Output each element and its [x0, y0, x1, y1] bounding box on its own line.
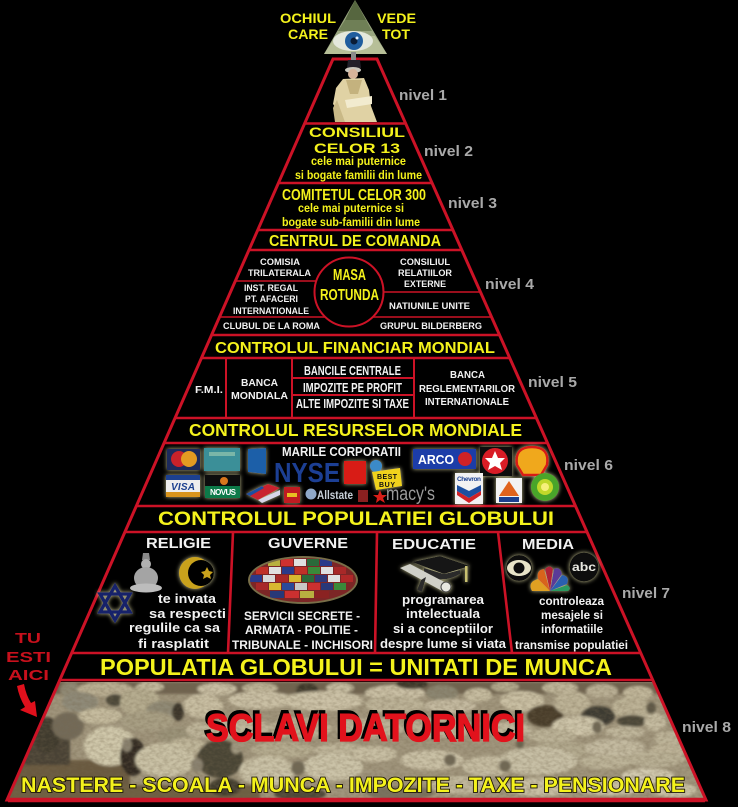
panel: level 4: CONSILIUL	[400, 257, 451, 267]
panel: level 5	[195, 364, 515, 411]
panel: media: informatiile	[541, 624, 603, 636]
callout: you are here	[6, 630, 51, 717]
heading: controlul financiar mondial: CONTROLUL FINANCIAR MONDIAL	[215, 340, 495, 357]
panel: religie: sa respecti	[149, 607, 226, 621]
top row	[59, 682, 78, 694]
panel: religie: fi rasplatit	[138, 637, 210, 651]
icon: star of David	[100, 586, 130, 620]
panel: level 4: EXTERNE	[404, 279, 446, 289]
panel: level 3: bogate sub-familii din lume	[282, 217, 420, 229]
round table	[314, 258, 384, 326]
panel: level 4: NATIUNILE UNITE	[389, 301, 470, 311]
panel: religie: regulile ca sa	[129, 621, 221, 635]
panel: level 5: BANCA	[450, 369, 485, 381]
callout: you are here: TU	[15, 630, 41, 647]
logos: cards and banks: BUY	[379, 482, 395, 489]
panel: educatie: programarea	[402, 593, 485, 607]
panel: level 5: REGLEMENTARILOR	[419, 383, 515, 395]
level 5 label: nivel 5	[528, 374, 577, 391]
eye caption left	[280, 10, 336, 42]
icon: flag globe	[248, 556, 358, 604]
panel: religie: RELIGIE	[146, 536, 211, 552]
icon: graduation cap and diploma	[400, 556, 470, 592]
logo: Allstate	[306, 488, 368, 502]
bottom row	[209, 778, 241, 796]
eye caption right: TOT	[382, 26, 410, 42]
panel: media: MEDIA	[522, 537, 575, 553]
arrow: pointing to base	[17, 684, 37, 717]
panel: level 4: INST. REGAL	[244, 283, 298, 293]
panel: level 3	[282, 187, 426, 229]
logos: cards and banks: VISA	[171, 482, 195, 493]
panel: level 4: CLUBUL DE LA ROMA	[223, 321, 320, 331]
panel: media: controleaza	[539, 596, 605, 608]
logo: NYSE: NYSE	[274, 457, 340, 488]
level 3 label: nivel 3	[448, 195, 497, 212]
heading: populatia globului: POPULATIA GLOBULUI = UNITATI DE MUNCA	[100, 654, 612, 680]
panel: educatie	[380, 537, 507, 651]
panel: sheep base	[10, 682, 704, 798]
callout: you are here: AICI	[8, 667, 49, 684]
heading: centrul de comanda: CENTRUL DE COMANDA	[269, 233, 441, 250]
panel: educatie: EDUCATIE	[392, 537, 476, 553]
panel: level 2: CONSILIUL	[309, 125, 405, 140]
eye caption right	[377, 10, 416, 42]
logos: cards and banks	[166, 448, 402, 503]
title: sclavi datornici: SCLAVI DATORNICI	[206, 707, 525, 750]
panel: guverne: GUVERNE	[268, 536, 348, 552]
eye caption left: CARE	[288, 26, 328, 42]
heading: marile corporatii: MARILE CORPORATII	[282, 444, 401, 459]
panel: media	[506, 537, 628, 652]
panel: level 5: ALTE IMPOZITE SI TAXE	[296, 396, 409, 411]
panel: level 3: COMITETUL CELOR 300	[282, 187, 426, 204]
logo: Allstate: Allstate	[317, 488, 353, 502]
logos: oil companies: Chevron	[457, 476, 481, 483]
panel: level 5: IMPOZITE PE PROFIT	[303, 381, 402, 395]
logo: macys: macy's	[386, 484, 435, 505]
round table: ROTUNDA	[320, 287, 379, 304]
icon: crescent and star	[179, 557, 214, 589]
panel: level 4: INTERNATIONALE	[233, 306, 309, 316]
panel: media: transmise populatiei	[515, 640, 628, 652]
panel: guverne: TRIBUNALE - INCHISORI	[232, 638, 373, 652]
fifth row	[135, 743, 195, 777]
level 2 label: nivel 2	[424, 143, 473, 160]
panel: level 4: TRILATERALA	[248, 268, 312, 278]
panel: level 3: cele mai puternice si	[298, 203, 404, 215]
title: sclavi datornici: SCLAVI DATORNICI	[204, 704, 523, 747]
third row	[36, 716, 58, 752]
panel: level 2: cele mai puternice	[311, 156, 406, 168]
eye caption left: OCHIUL	[280, 10, 336, 26]
panel: level 4: PT. AFACERI	[245, 294, 298, 304]
level 4 label: nivel 4	[485, 276, 535, 293]
panel: level 2: CELOR 13	[314, 141, 401, 156]
heads	[122, 738, 132, 752]
icon: NBC peacock	[530, 566, 570, 591]
icon: buddha	[130, 553, 162, 592]
heading: controlul resurselor mondiale: CONTROLUL RESURSELOR MONDIALE	[189, 420, 522, 440]
panel: level 2	[295, 125, 422, 182]
panel: guverne: SERVICII SECRETE -	[244, 609, 360, 623]
eye caption right: VEDE	[377, 10, 416, 26]
panel: educatie: si a conceptiilor	[393, 622, 493, 636]
logos: oil companies	[413, 447, 559, 504]
panel: level 4: COMISIA	[260, 257, 301, 267]
icon: crowned figure	[333, 52, 377, 122]
level 1 label: nivel 1	[399, 87, 447, 104]
panel: guverne	[232, 536, 373, 652]
round table: MASA	[333, 267, 366, 284]
panel: level 6 corporations	[166, 444, 559, 505]
heading: controlul populatiei globului: CONTROLUL POPULATIEI GLOBULUI	[158, 508, 554, 530]
panel: level 5: BANCA	[241, 377, 278, 389]
fourth row	[84, 726, 136, 766]
panel: guverne: ARMATA - POLITIE -	[245, 623, 358, 637]
panel: level 4: GRUPUL BILDERBERG	[380, 321, 482, 331]
panel: level 5: MONDIALA	[231, 390, 288, 402]
level 7 label: nivel 7	[622, 585, 670, 602]
logos: cards and banks: BEST	[377, 474, 398, 481]
logos: oil companies: ARCO	[418, 452, 454, 467]
callout: you are here: ESTI	[6, 649, 51, 666]
panel: level 4: RELATIILOR	[398, 268, 453, 278]
panel: religie: te invata	[158, 592, 217, 606]
logos: cards and banks: NOVUS	[210, 488, 237, 497]
icon: abc: abc	[572, 560, 596, 574]
icon: all-seeing eye pyramid	[324, 0, 387, 54]
panel: religie	[100, 536, 226, 651]
level 6 label: nivel 6	[564, 457, 613, 474]
icon: CBS eye	[506, 555, 532, 581]
logo: macys	[373, 484, 435, 505]
panel: level 2: si bogate familii din lume	[295, 170, 422, 182]
panel: educatie: despre lume si viata	[380, 637, 507, 651]
panel: educatie: intelectuala	[406, 607, 481, 621]
panel: media: mesajele si	[541, 610, 603, 622]
panel: level 5: F.M.I.	[195, 384, 223, 396]
second row	[62, 692, 98, 712]
level 8 label: nivel 8	[682, 719, 731, 736]
panel: level 5: INTERNATIONALE	[425, 396, 509, 408]
panel: level 5: BANCILE CENTRALE	[304, 364, 401, 378]
panel: level 4	[223, 257, 482, 331]
life stages text: NASTERE - SCOALA - MUNCA - IMPOZITE - TAXE - PENSIONARE	[21, 774, 685, 797]
